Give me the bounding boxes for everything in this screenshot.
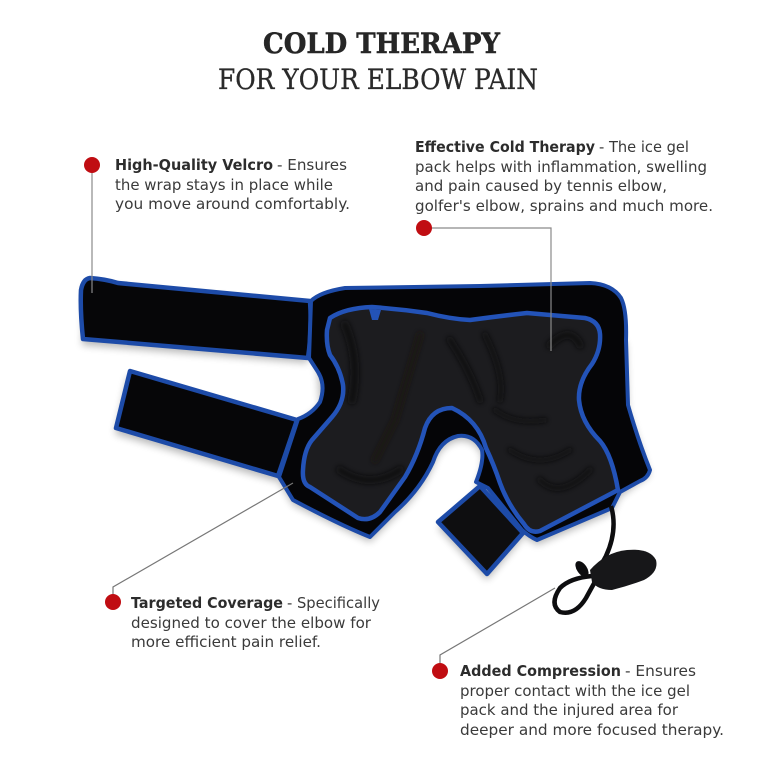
callout: added compression: deeper and more focused therapy. bbox=[460, 721, 724, 739]
inflation tube and bulb bbox=[554, 506, 656, 613]
velcro tab bbox=[438, 486, 523, 574]
callout: effective cold therapy: and pain caused by tennis elbow, bbox=[415, 177, 667, 195]
callout: targeted coverage: more efficient pain relief. bbox=[131, 633, 321, 651]
callout: high-quality velcro: the wrap stays in place while bbox=[115, 176, 333, 194]
callout: effective cold therapy: - The ice gel bbox=[599, 138, 689, 156]
callout: targeted coverage: designed to cover the elbow for bbox=[131, 614, 372, 632]
callout: added compression bbox=[432, 588, 724, 739]
callout: effective cold therapy: pack helps with inflammation, swelling bbox=[415, 158, 707, 176]
callout: targeted coverage bbox=[105, 483, 380, 651]
callout: added compression: pack and the injured area for bbox=[460, 701, 679, 719]
lower velcro strap bbox=[116, 371, 297, 476]
title: COLD THERAPY bbox=[263, 27, 501, 60]
callout: targeted coverage: - Specifically bbox=[287, 594, 380, 612]
callout: high-quality velcro: you move around comfortably. bbox=[115, 195, 350, 213]
callout: effective cold therapy: Effective Cold Therapy bbox=[415, 138, 595, 156]
soft shadow bbox=[82, 284, 650, 580]
upper velcro strap bbox=[81, 278, 311, 358]
callout: targeted coverage: Targeted Coverage bbox=[131, 594, 283, 612]
callout: high-quality velcro: - Ensures bbox=[277, 156, 347, 174]
callout: effective cold therapy: golfer's elbow, sprains and much more. bbox=[415, 197, 713, 215]
wrap body bbox=[279, 283, 650, 540]
callout: high-quality velcro: High-Quality Velcro bbox=[115, 156, 273, 174]
title: FOR YOUR ELBOW PAIN bbox=[218, 63, 538, 96]
title bbox=[218, 27, 538, 96]
callout: effective cold therapy bbox=[415, 138, 713, 351]
callout: added compression: - Ensures bbox=[625, 662, 696, 680]
product: elbow cold therapy wrap bbox=[81, 278, 656, 613]
callout: added compression: proper contact with the ice gel bbox=[460, 682, 690, 700]
callout: added compression: Added Compression bbox=[460, 662, 621, 680]
callout: high-quality velcro bbox=[84, 156, 350, 293]
ice gel pack bbox=[303, 307, 618, 532]
